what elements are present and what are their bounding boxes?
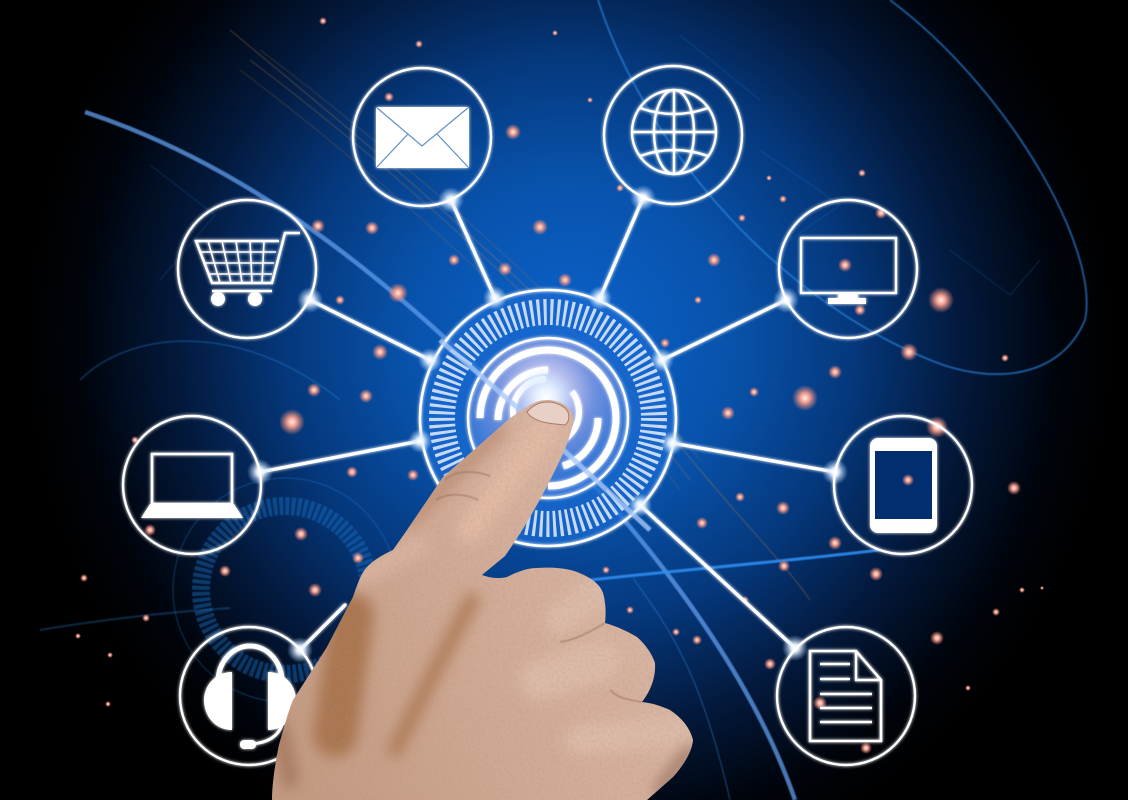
particle dots bbox=[75, 17, 1044, 754]
icon: monitor bbox=[779, 200, 917, 338]
knuckle and finger creases bbox=[436, 472, 642, 702]
skin texture bbox=[329, 401, 684, 784]
icon: headset bbox=[180, 627, 318, 765]
tick ring bbox=[442, 312, 654, 524]
icon: tablet bbox=[834, 416, 972, 554]
connector lines bbox=[260, 198, 835, 650]
connector node glows bbox=[247, 185, 848, 663]
fingernail bbox=[527, 402, 569, 425]
icon: laptop bbox=[123, 416, 261, 554]
skin shading bbox=[280, 430, 690, 790]
icon: mail bbox=[353, 68, 491, 206]
icon: document bbox=[777, 627, 915, 765]
icon: globe bbox=[604, 66, 742, 204]
diagonal light band over hub bbox=[440, 340, 650, 530]
central hub bbox=[420, 290, 676, 546]
hand pointing at hub bbox=[260, 395, 710, 800]
icon: cart bbox=[178, 200, 316, 338]
